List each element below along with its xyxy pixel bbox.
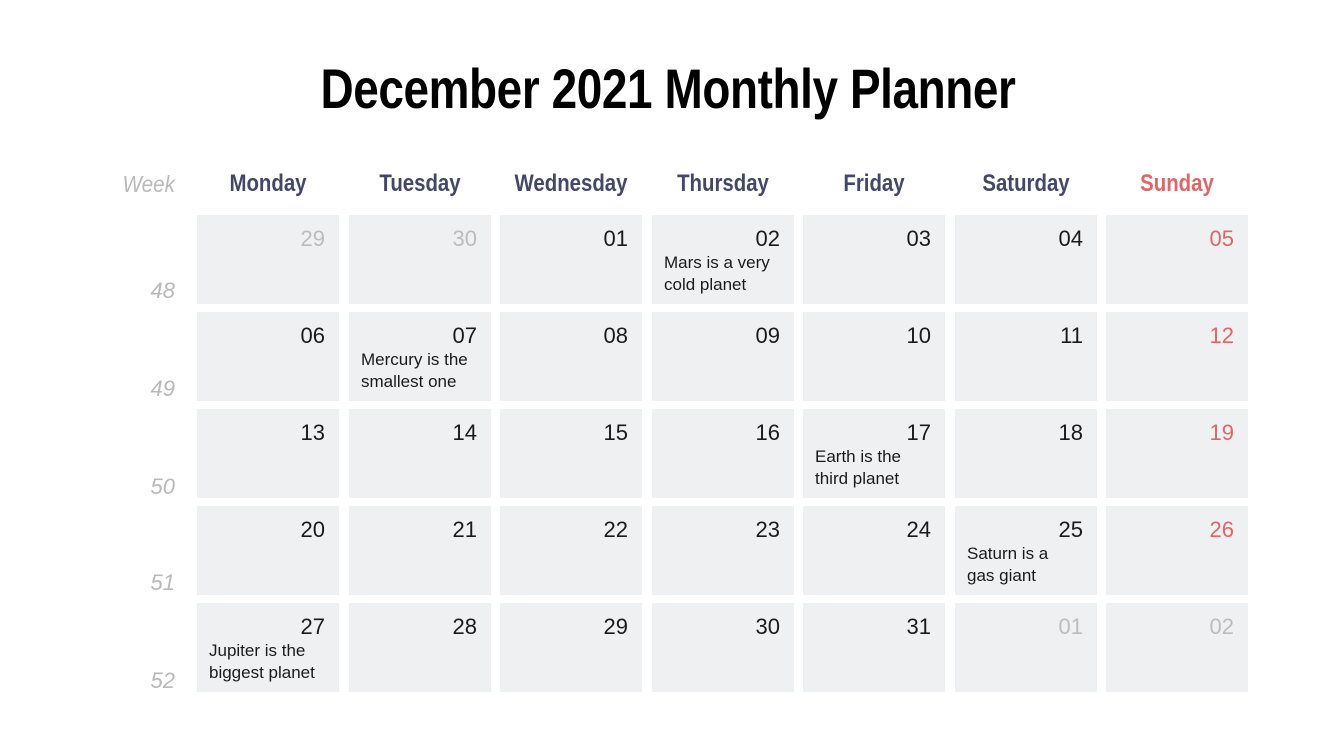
row 1: 29 <box>301 226 325 251</box>
header: Thursday: Thursday <box>677 170 769 197</box>
row 2: 11 <box>1060 323 1083 348</box>
header: Wednesday: Wednesday <box>515 170 627 197</box>
row 5 <box>197 603 1248 692</box>
title: December 2021 Monthly Planner <box>320 57 1016 120</box>
row 2: 07 <box>453 323 477 348</box>
week 48: 48 <box>151 278 175 303</box>
week 50: 50 <box>151 474 175 499</box>
row 5: 28 <box>453 614 477 639</box>
row 5: 02 <box>1210 614 1234 639</box>
row 4: 20 <box>301 517 325 542</box>
row 5: Jupiter is the <box>209 641 305 660</box>
row 2: 12 <box>1210 323 1234 348</box>
header: Tuesday: Tuesday <box>379 170 461 197</box>
row 1: 30 <box>453 226 477 251</box>
row 1: 04 <box>1059 226 1083 251</box>
row 1 <box>197 215 1248 304</box>
row 3: 15 <box>604 420 628 445</box>
week 51: 51 <box>151 570 175 595</box>
row 2: 10 <box>907 323 931 348</box>
row 2: Mercury is the <box>361 350 468 369</box>
row 3: Earth is the <box>815 447 901 466</box>
row 1: cold planet <box>664 275 746 294</box>
row 5: 29 <box>604 614 628 639</box>
row 3: 18 <box>1059 420 1083 445</box>
row 4: 22 <box>604 517 628 542</box>
row 1: 02 <box>756 226 780 251</box>
row 3: 17 <box>907 420 931 445</box>
header: Friday: Friday <box>843 170 905 197</box>
row 2: smallest one <box>361 372 456 391</box>
week 52: 52 <box>151 668 175 693</box>
row 5: biggest planet <box>209 663 315 682</box>
row 3: third planet <box>815 469 899 488</box>
row 4: 21 <box>453 517 477 542</box>
header: Saturday: Saturday <box>982 170 1070 197</box>
header: Monday: Monday <box>229 170 307 197</box>
row 5: 31 <box>907 614 931 639</box>
row 5: 01 <box>1059 614 1083 639</box>
row 1: Mars is a very <box>664 253 770 272</box>
row 2: 09 <box>756 323 780 348</box>
row 4: Saturn is a <box>967 544 1048 563</box>
header: Sunday: Sunday <box>1140 170 1214 197</box>
row 4: 23 <box>756 517 780 542</box>
row 1: 03 <box>907 226 931 251</box>
row 5: 27 <box>301 614 325 639</box>
week 49: 49 <box>151 376 175 401</box>
row 3 <box>197 409 1248 498</box>
row 1: 05 <box>1210 226 1234 251</box>
week header: Week <box>122 171 175 197</box>
row 1: 01 <box>604 226 628 251</box>
row 4: 24 <box>907 517 931 542</box>
row 3: 13 <box>301 420 325 445</box>
row 5: 30 <box>756 614 780 639</box>
row 3: 19 <box>1210 420 1234 445</box>
row 4: gas giant <box>967 566 1036 585</box>
row 2: 08 <box>604 323 628 348</box>
row 4 <box>197 506 1248 595</box>
row 4: 26 <box>1210 517 1234 542</box>
row 2: 06 <box>301 323 325 348</box>
row 2 <box>197 312 1248 401</box>
row 4: 25 <box>1059 517 1083 542</box>
row 3: 14 <box>453 420 477 445</box>
row 3: 16 <box>756 420 780 445</box>
